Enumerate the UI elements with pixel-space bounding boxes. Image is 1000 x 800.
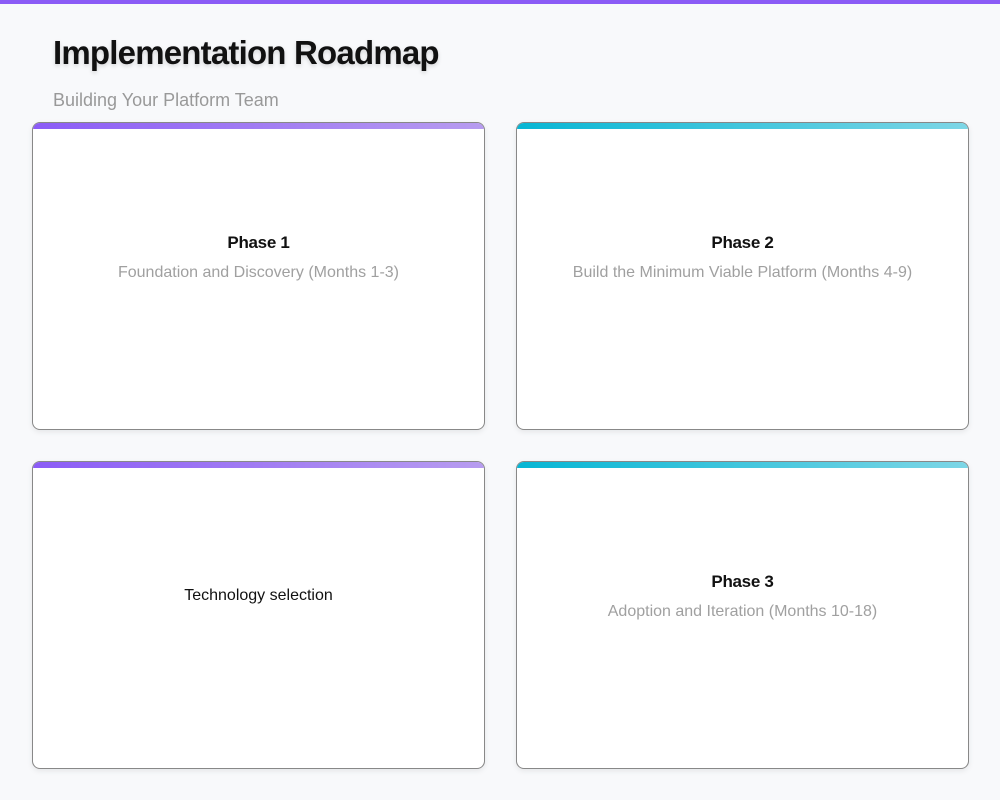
panel: phase 3: [516, 461, 969, 769]
panel: phase 1: [32, 122, 485, 430]
panel: technology selection: Technology selection: [184, 587, 333, 604]
panel: phase 2: Build the Minimum Viable Platform (Months 4-9): [573, 264, 912, 280]
subtitle: Building Your Platform Team: [53, 90, 279, 110]
panel: phase 2: Phase 2: [711, 232, 774, 252]
panel: phase 3: Adoption and Iteration (Months 10-18): [608, 602, 877, 620]
panel: phase 2: [516, 122, 969, 430]
panel: technology selection: [32, 461, 485, 769]
panel: phase 3: Phase 3: [711, 572, 774, 590]
title: Implementation Roadmap: [53, 34, 439, 71]
panel: phase 1: Phase 1: [227, 232, 290, 252]
panel: phase 1: Foundation and Discovery (Months 1-3): [118, 264, 399, 280]
